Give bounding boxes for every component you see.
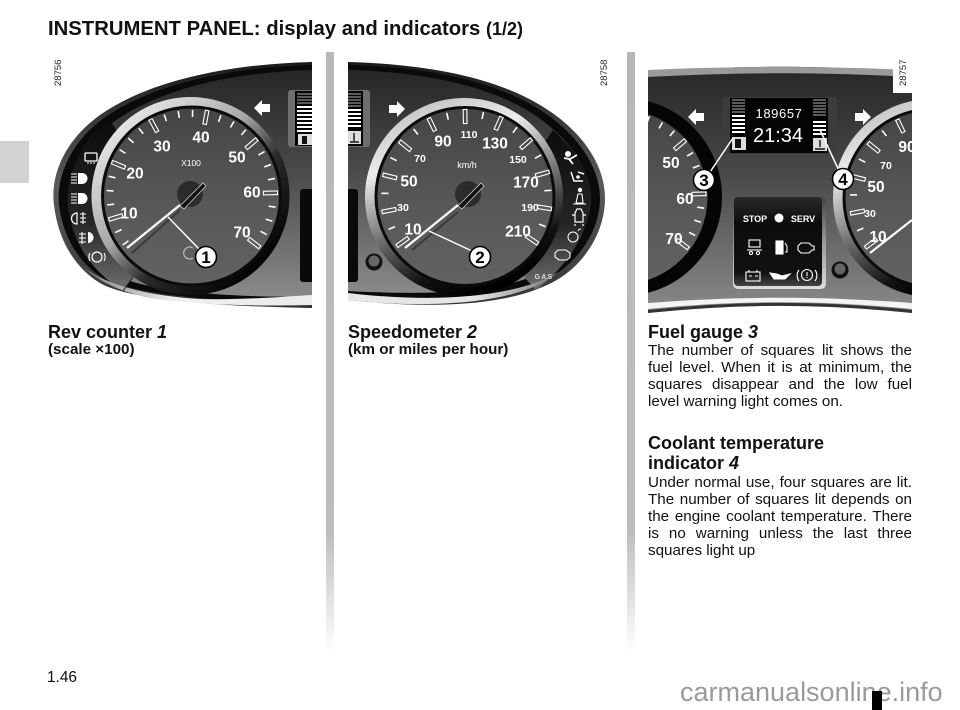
fuel bar display xyxy=(288,90,312,147)
large dial numbers: 10 xyxy=(404,222,422,238)
callout 3 xyxy=(694,138,733,190)
callout 4: 4 xyxy=(838,170,848,189)
text: coolant temperature: the engine coolant temperature. There xyxy=(648,508,912,525)
turn arrow left xyxy=(688,109,704,125)
large dial numbers: 50 xyxy=(400,174,418,190)
text: coolant temperature: The number of squares lit depends on xyxy=(648,491,912,508)
fuel bars xyxy=(732,100,745,112)
black page mark xyxy=(872,691,882,710)
large dial numbers xyxy=(400,134,539,240)
text: coolant temperature: is no warning unless the last three xyxy=(648,525,912,542)
dial numbers: 30 xyxy=(153,138,171,156)
side tab xyxy=(0,141,29,183)
panel: speedometer illustration xyxy=(338,62,605,305)
right dial partial: 10 xyxy=(869,229,887,246)
temperature bar display xyxy=(348,90,370,147)
band divider xyxy=(123,277,133,291)
odometer: 189657 xyxy=(756,106,802,121)
callout 2 xyxy=(429,231,490,268)
unit label: km/h xyxy=(457,160,477,170)
right dial partial: 50 xyxy=(867,179,885,196)
page number: 1.46 xyxy=(47,669,77,686)
small dial numbers xyxy=(397,129,539,214)
separator 2 xyxy=(627,52,635,652)
cluster body xyxy=(648,67,912,313)
left dial partial: 60 xyxy=(676,191,694,208)
warning icons xyxy=(71,153,105,262)
callout 1 xyxy=(168,217,216,268)
large dial numbers: 210 xyxy=(505,224,531,240)
text: fuel gauge xyxy=(648,342,912,410)
centre recess xyxy=(348,189,358,282)
centre recess xyxy=(300,189,312,282)
indicator lamp xyxy=(832,262,848,278)
heading: fuel gauge: Fuel gauge 3 xyxy=(648,322,758,342)
callout 4 xyxy=(820,130,854,190)
engine icon xyxy=(184,247,193,259)
heading: coolant temperature indicator: Coolant temperature xyxy=(648,433,824,453)
title: INSTRUMENT PANEL: display and indicators (1/2) xyxy=(48,18,523,40)
icon band xyxy=(524,130,591,290)
dial numbers: 10 xyxy=(120,206,138,222)
figure code 28757 xyxy=(893,56,912,93)
warning light panel: SERV xyxy=(791,214,815,224)
figure code 28758: 28758 xyxy=(599,60,610,86)
small dial numbers: 110 xyxy=(461,129,478,141)
text: coolant temperature: squares light up xyxy=(648,542,755,559)
text: coolant temperature: Under normal use, four squares are lit. xyxy=(648,474,912,491)
clock: 21:34 xyxy=(753,125,803,147)
figure code 28756: 28756 xyxy=(53,60,64,86)
needle xyxy=(405,181,484,250)
dial numbers: 70 xyxy=(233,224,251,242)
cluster body xyxy=(348,62,605,305)
large dial numbers: 90 xyxy=(434,134,452,150)
text: fuel gauge: fuel level. When it is at minimum, the xyxy=(648,359,912,376)
text: coolant temperature xyxy=(648,474,912,559)
panel: rev counter illustration xyxy=(53,62,320,308)
note: speedometer units: (km or miles per hour) xyxy=(348,341,508,358)
column separators and gauge illustrations xyxy=(53,52,912,638)
bottom highlight xyxy=(78,262,312,305)
text: fuel gauge: squares disappear and the low fuel xyxy=(648,376,912,393)
temperature bars xyxy=(813,100,826,115)
large dial numbers: 130 xyxy=(482,136,508,152)
heading: rev counter: Rev counter 1 xyxy=(48,322,167,342)
small dial numbers: 150 xyxy=(509,154,527,166)
separator 1 xyxy=(326,52,334,652)
left dial partial xyxy=(648,101,722,293)
large dial numbers: 170 xyxy=(513,174,539,192)
right dial partial xyxy=(833,101,912,295)
small dial numbers: 70 xyxy=(414,153,426,165)
panel: centre display illustration xyxy=(648,66,912,313)
heading: speedometer: Speedometer 2 xyxy=(348,322,477,342)
dial numbers: 20 xyxy=(126,166,144,182)
left dial partial: 70 xyxy=(665,231,683,248)
heading: coolant temperature indicator xyxy=(648,433,824,473)
turn arrow xyxy=(389,101,405,117)
heading: coolant temperature indicator: indicator 4 xyxy=(648,453,739,473)
text: fuel gauge: The number of squares lit shows the xyxy=(648,342,912,359)
right dial partial: 70 xyxy=(880,160,892,172)
note: rev counter scale: (scale ×100) xyxy=(48,341,135,358)
figure code 28757: 28757 xyxy=(898,60,909,86)
warning light panel xyxy=(733,197,826,289)
GAS label: GAS xyxy=(535,274,553,281)
dial numbers xyxy=(120,130,261,242)
callout 3: 3 xyxy=(699,171,709,190)
right dial partial: 90 xyxy=(898,139,916,156)
text: fuel gauge: level warning light comes on. xyxy=(648,393,843,410)
scale label: X100 xyxy=(181,158,201,168)
needle xyxy=(127,181,206,253)
cluster body xyxy=(53,62,312,308)
bottom highlight xyxy=(348,272,558,304)
turn arrow right xyxy=(855,109,871,125)
small dial numbers: 30 xyxy=(397,202,409,214)
rev counter dial xyxy=(92,97,290,295)
icon band xyxy=(68,123,133,291)
LCD display xyxy=(722,97,837,154)
warning light panel: STOP xyxy=(743,214,767,224)
dial numbers: 50 xyxy=(228,150,246,166)
warning icons xyxy=(555,151,586,260)
right dial partial: 30 xyxy=(864,208,876,220)
dial numbers: 60 xyxy=(243,184,261,202)
small dial numbers: 190 xyxy=(521,202,539,214)
speedometer dial xyxy=(365,98,563,296)
watermark: carmanualsonline.info xyxy=(680,677,943,707)
dial numbers: 40 xyxy=(192,130,210,146)
callout 2: 2 xyxy=(475,248,485,267)
callout 1: 1 xyxy=(201,248,211,267)
left dial partial: 50 xyxy=(662,155,680,172)
indicator lamp xyxy=(366,254,382,270)
turn arrow xyxy=(254,100,270,116)
